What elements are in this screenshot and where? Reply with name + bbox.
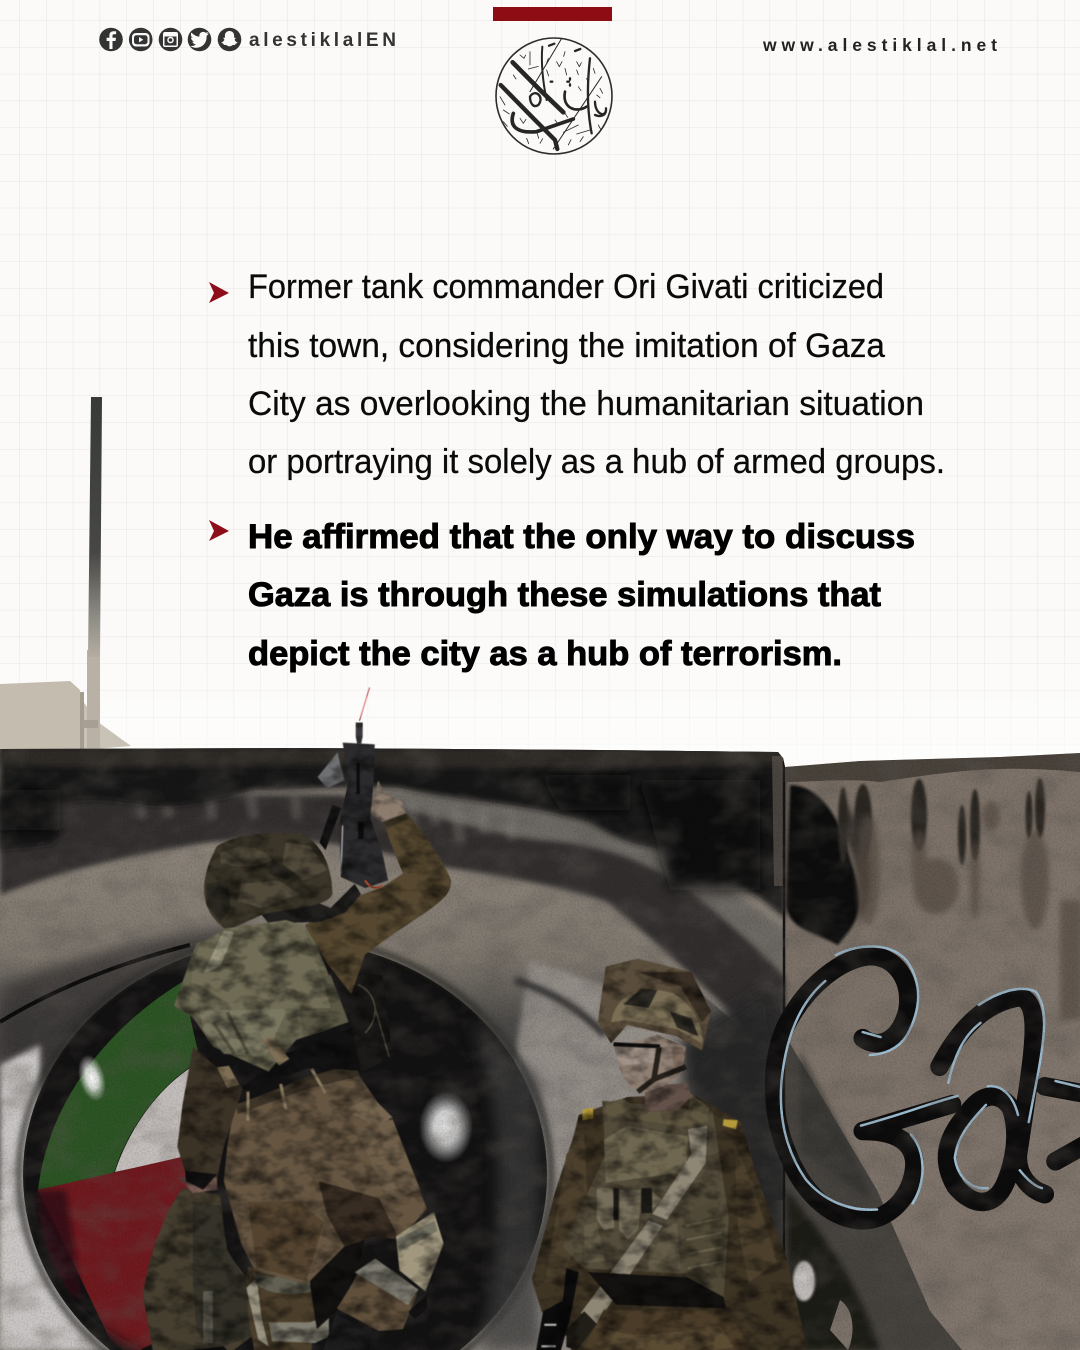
- iris ring soft shade: [19, 936, 551, 1350]
- paragraph: regular text: [248, 268, 945, 481]
- eye outer dark ring: [0, 795, 785, 1072]
- side panel webbing: [686, 1218, 723, 1268]
- knee strap: [396, 1221, 437, 1252]
- belt loops: [248, 1069, 325, 1121]
- paragraph: bold text: depict the city as a hub of terrorism.: [248, 635, 842, 673]
- light lid right of iris: [470, 960, 705, 1350]
- rifle strap leg: [320, 805, 341, 850]
- dark stripe to right wall: [785, 1035, 962, 1350]
- vest strap: [203, 930, 234, 973]
- flag left shade: [36, 1190, 82, 1300]
- mag pouches: [597, 1188, 663, 1240]
- rough grey top edge: [0, 748, 785, 768]
- helmet cover rim: [638, 972, 711, 1022]
- rifle body: [339, 743, 388, 888]
- black pack right: [344, 974, 393, 1073]
- pack right panel: [296, 974, 349, 1036]
- shin: [337, 1274, 417, 1331]
- knee camo: [396, 1212, 444, 1291]
- spray shade near right soldier: [672, 995, 783, 1248]
- dark glove: [408, 1295, 427, 1319]
- calligraphy logo emblem: [496, 38, 612, 154]
- muzzle: [356, 723, 363, 743]
- pocket flap: [344, 1097, 393, 1126]
- pouch crease: [214, 1012, 248, 1054]
- torso and sleeves: [532, 1094, 807, 1350]
- bullet arrow one: [209, 282, 229, 303]
- trouser crease: [591, 1326, 734, 1350]
- helmet: [204, 833, 332, 930]
- concrete mottling: [0, 748, 1080, 1350]
- goggles: [614, 1044, 659, 1065]
- laser: [360, 688, 370, 721]
- viewer left sleeve: [177, 1047, 243, 1179]
- arm and torso: [305, 812, 451, 994]
- pouch light: [203, 943, 269, 971]
- helmet camo patches: [220, 843, 327, 908]
- stripe soft shade: [800, 1050, 870, 1200]
- website url: www.alestiklal.net: [762, 35, 997, 55]
- faded drip tails: [856, 801, 1080, 1020]
- cuff: [381, 812, 408, 829]
- right wall base: [784, 750, 1080, 1350]
- paragraph: regular text: or portraying it solely as a hub of armed groups.: [248, 443, 945, 481]
- rifle highlights: [541, 1324, 556, 1347]
- backpack: [174, 930, 349, 1072]
- paragraph: bold text: Gaza is through these simulations that: [248, 576, 882, 614]
- boot: [319, 1314, 374, 1350]
- lid line right: [515, 980, 605, 1035]
- flag white: [115, 1068, 195, 1172]
- paragraph: bold text: [248, 518, 915, 673]
- right wall black blob: [786, 785, 860, 945]
- soldier climbing: [143, 688, 451, 1350]
- epaulet right: [723, 1119, 738, 1129]
- belt: [588, 1272, 726, 1308]
- glove: [179, 1178, 217, 1193]
- crouching soldier behind: [143, 1188, 257, 1350]
- background building and pipe: [0, 397, 131, 750]
- wall seam: [783, 755, 785, 1350]
- grey band with drips: [370, 790, 785, 990]
- left wall base: [0, 745, 785, 1350]
- left leg: [248, 1267, 315, 1350]
- epaulet left: [582, 1108, 593, 1120]
- palestinian flag in iris: [30, 982, 200, 1350]
- lighter tag shard: [830, 1300, 853, 1350]
- black shirt at waist: [241, 1026, 362, 1090]
- stripe core shade: [786, 1190, 880, 1350]
- paragraph: bold text: He affirmed that the only way to discuss: [248, 518, 915, 556]
- trouser lower shade: [248, 1202, 324, 1281]
- icon: facebook: [99, 28, 123, 51]
- dark line of lid left: [0, 945, 190, 1022]
- collar: [606, 1094, 709, 1127]
- flag bottom shade: [100, 1318, 148, 1350]
- soldier body lower: [174, 930, 444, 1350]
- knee guard left: [246, 1278, 269, 1346]
- graffiti blue edges: [781, 946, 1080, 1210]
- dark lid shadow: [0, 925, 250, 1060]
- pack pouch: [193, 962, 286, 1057]
- highlight left: [78, 1055, 106, 1100]
- flag red: [38, 1155, 200, 1350]
- grid paper background: [0, 0, 1080, 760]
- sight: [318, 752, 344, 788]
- vest side panel: [682, 1201, 725, 1297]
- plate carrier: [563, 1101, 729, 1297]
- helmet camo top: [611, 989, 702, 1044]
- buckles: [217, 1036, 289, 1088]
- goggle strap: [614, 1044, 660, 1046]
- right wall blob halo: [846, 802, 870, 927]
- trousers: [566, 1309, 770, 1350]
- soldier leaning on wall: [531, 959, 807, 1350]
- drip stains in ring: [135, 795, 517, 843]
- iris black sheen: [470, 1020, 540, 1350]
- wall rough corner: [772, 756, 784, 886]
- belt: [236, 1064, 360, 1114]
- dark gap: [310, 1236, 365, 1329]
- chin strap: [638, 1047, 686, 1092]
- white blob at bottom: [793, 1261, 815, 1301]
- paragraph: regular text: City as overlooking the humanitarian situation: [248, 385, 924, 423]
- dark gaps in vest: [614, 1188, 652, 1220]
- upper lid light band: [0, 962, 783, 1200]
- vest top: [189, 920, 331, 1011]
- concrete grain: [0, 748, 1080, 1350]
- sling buckle: [648, 1213, 668, 1227]
- lower pouch: [584, 1222, 681, 1270]
- bullet arrow two: [209, 520, 229, 541]
- right wall top band: [785, 753, 1080, 782]
- trouser shadow: [319, 1181, 400, 1247]
- social icons row: [99, 28, 241, 51]
- rifle steel strip: [341, 825, 343, 874]
- photo: graffiti concrete wall: [0, 745, 1080, 1350]
- red top bar: [493, 7, 612, 21]
- rifle: [531, 1268, 579, 1350]
- drips: [838, 778, 1045, 865]
- icon: youtube: [129, 28, 152, 51]
- cargo pocket: [356, 1119, 420, 1200]
- icon: snapchat: [218, 28, 241, 51]
- helmet: [598, 959, 711, 1051]
- neck: [645, 1083, 691, 1111]
- highlight right: [419, 1091, 473, 1163]
- flag green: [38, 982, 200, 1190]
- graffiti black strokes: [774, 956, 1080, 1220]
- dark blotches on top: [0, 775, 760, 890]
- soldier upper body: [189, 688, 451, 1011]
- trousers: [224, 1074, 427, 1284]
- paragraph: regular text: Former tank commander Ori Givati criticized: [248, 268, 884, 306]
- pack straps: [358, 985, 389, 1057]
- rifle details: [356, 763, 364, 839]
- iris: [23, 940, 547, 1350]
- icon: instagram: [159, 28, 182, 51]
- shin strap: [355, 1259, 418, 1305]
- graffiti Gaza: [774, 946, 1080, 1220]
- hand: [369, 781, 406, 822]
- sleeve highlight: [545, 1133, 777, 1283]
- helmet camo dark: [624, 988, 698, 1036]
- head: [616, 1035, 686, 1094]
- orange cord: [365, 880, 382, 888]
- glove at rifle: [566, 1311, 597, 1350]
- sclera left: [0, 1042, 110, 1350]
- sling: [581, 1126, 707, 1324]
- vest upper pouches: [604, 1126, 688, 1183]
- black sprayed top band: [0, 745, 785, 918]
- boot strap left: [269, 1315, 329, 1343]
- paragraph: regular text: this town, considering the imitation of Gaza: [248, 327, 886, 365]
- shin strap left: [253, 1272, 314, 1294]
- shoulder strap: [262, 884, 361, 923]
- social handle: alestiklalEN: [249, 30, 396, 51]
- ear: [672, 1046, 685, 1067]
- icon: twitter: [188, 28, 211, 51]
